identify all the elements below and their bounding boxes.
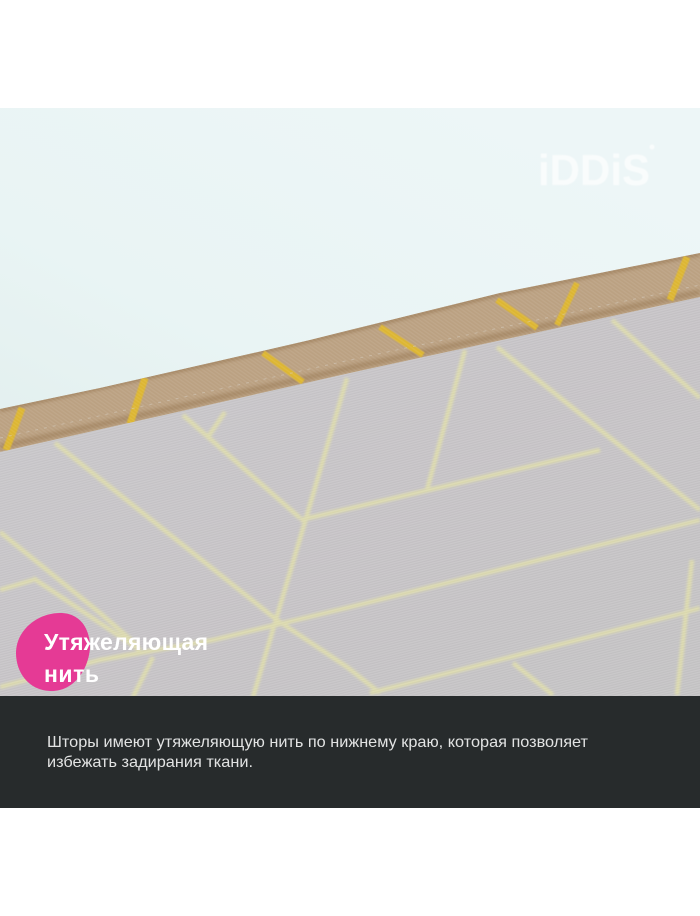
caption text: избежать задирания ткани. [47, 754, 253, 771]
caption text: Шторы имеют утяжеляющую нить по нижнему краю, которая позволяет [47, 734, 589, 751]
hem: weighted thread band [0, 245, 700, 460]
dark caption band [0, 696, 700, 808]
heading: нить [44, 661, 99, 687]
fabric panel with yellow geometric lines [0, 290, 700, 697]
logo: IDDIS: iDDiS [538, 146, 650, 195]
photo: curtain background [0, 108, 700, 697]
infographic canvas [0, 108, 700, 808]
caption text [47, 734, 589, 771]
pink blob accent [16, 613, 90, 691]
heading [44, 629, 208, 687]
heading: Утяжеляющая [44, 629, 208, 655]
